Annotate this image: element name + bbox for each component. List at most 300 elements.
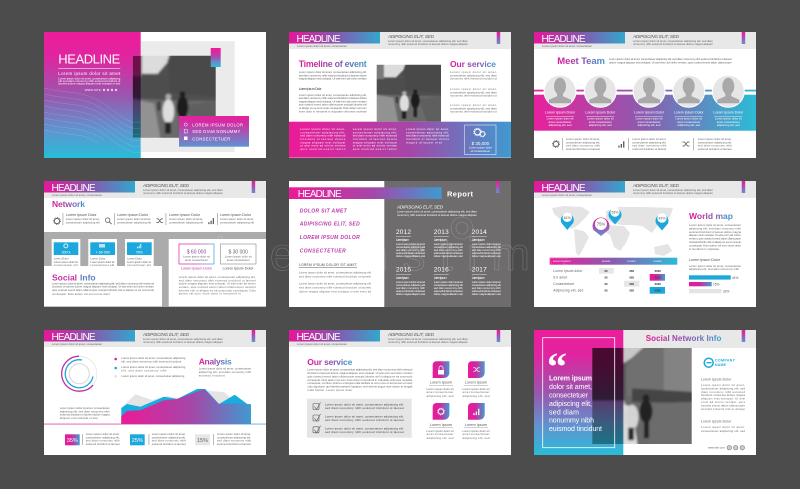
network item 1: consectetuer adipiscing elit [66, 220, 100, 224]
service tile: chart [462, 403, 490, 440]
band text columns: consectetuer adipiscing elit, [406, 130, 449, 134]
header band: nonummy nibh euismod tincidunt ut laoreet dolore magna aliquam [388, 340, 469, 344]
header band [289, 330, 511, 347]
panel: pricing: lobortis nisl ut aliquip ex ea commodo consequat. Duis [179, 288, 256, 292]
company text: consectetuer adipiscing elit, sed [701, 386, 745, 390]
header band: ADIPISCING ELIT, SED [142, 183, 190, 188]
header band: ADIPISCING ELIT, SED [632, 183, 680, 188]
quote text: consectetuer [549, 393, 589, 400]
subheading and paragraphs: LOREM IPSUM DOLOR SIT AMET [299, 263, 357, 267]
header band: ADIPISCING ELIT, SED [632, 34, 680, 39]
progress bars: Lorem Ipsum Dolor [689, 258, 721, 262]
team member 2: adipiscing elit, sed [589, 123, 612, 127]
year 2016: Lorem Ipsum [434, 276, 447, 280]
bullet notes: Lorem ipsum dolor sit amet, consectetuer adipiscing [121, 374, 185, 378]
header band: Lorem ipsum dolor sit amet, consectetuer adipiscing elit, sed diam [633, 39, 714, 43]
feature 1: Lorem ipsum dolor sit amet, [566, 137, 600, 141]
panel: social info: tincidunt ut laoreet dolore magna aliquam erat volutpat. Ut wisi enim ad minim veniam [52, 285, 155, 289]
stat 25%: consectetuer adipiscing elit, [152, 435, 186, 439]
service paragraph: odio dignissim qui blandit praesent luptatum zzril delenit augue duis dolore te feugait [307, 385, 413, 389]
network item 3: Lorem Ipsum Dolor [169, 213, 201, 217]
data table: 88 [604, 276, 608, 280]
timeline paragraph: sed diam nonummy nibh euismod tincidunt ut laoreet dolore [299, 96, 367, 100]
header band: nonummy nibh euismod tincidunt ut laoreet dolore magna aliquam [633, 191, 714, 195]
panel: pricing: dolore magna aliquam erat volutpat. Ut wisi enim ad minim [179, 282, 256, 286]
bullet notes: Lorem ipsum dolor sit amet, consectetuer adipiscing [121, 356, 186, 360]
accent square [211, 48, 221, 67]
service tile: lock: Lorem Ipsum [430, 381, 452, 385]
band text columns: Lorem ipsum dolor sit amet, [353, 127, 397, 131]
service paragraph: consequat. Duis autem vel eum iriure dolor in hendrerit in vulputate velit esse molestie [307, 378, 413, 382]
intro text: dolore magna aliquam erat volutpat. Ut wisi enim ad minim veniam, quis nostrud exerci tation ullamcorper [609, 60, 732, 64]
service paragraph: nulla facilisi. Lorem ipsum dolor [307, 388, 352, 392]
checklist panel: Lorem ipsum dolor sit amet, consectetuer adipiscing elit, [325, 402, 404, 406]
stat box with gears: $ 30,000 [472, 141, 490, 146]
year 2017: euismod tincidunt ut laoreet [472, 289, 501, 293]
team member 3: amet consectetuer [637, 120, 661, 124]
year 2012: euismod tincidunt ut laoreet [396, 251, 425, 255]
team member 5: adipiscing elit, sed [717, 123, 740, 127]
team member 5: amet consectetuer [717, 120, 740, 124]
service tile: chart: Lorem Ipsum [465, 423, 487, 427]
item list: DOLOR SIT AMET [300, 209, 348, 215]
watermark: dreamstime [200, 228, 570, 280]
data table: Lorem [653, 259, 662, 263]
team member 5: Lorem Ipsum Dolor [713, 110, 744, 114]
slide 6: world map [534, 181, 756, 307]
callout box: LOREM IPSUM DOLOR [192, 122, 243, 127]
header band [289, 32, 511, 49]
year 2016: dolore magna aliquam erat [434, 292, 463, 296]
area chart [121, 389, 251, 424]
band text columns: ut wisi enim ad minim veniam [353, 144, 398, 148]
team member 3: Lorem Ipsum Dolor [634, 110, 665, 114]
data table: Sit amet [553, 276, 567, 280]
cover subtitle: laoreet dolore magna aliquam erat volutpat ut wisi [58, 82, 121, 86]
network item 4: Lorem ipsum dolor sit amet, [220, 217, 254, 221]
company text: Lorem ipsum dolor sit amet, [701, 383, 745, 387]
panel: pricing: sed diam nonummy nibh euismod tincidunt ut laoreet [179, 278, 256, 282]
stat 15%: Lorem ipsum dolor sit amet, [217, 432, 251, 436]
stat card 2: Lorem Dolor [90, 256, 105, 260]
service tile: shuffle: Lorem ipsum dolor sit [462, 387, 490, 391]
panel: pricing: Lorem Ipsum Dolor [181, 266, 213, 270]
company text: diam nonummy nibh euismod [701, 390, 745, 394]
timeline paragraph: Lorem ipsum dolor sit amet, consectetuer adipiscing elit, [299, 70, 367, 74]
year 2013: Lorem ipsum dolor sit amet [434, 242, 463, 246]
team member 4: Lorem Ipsum Dolor [674, 110, 704, 114]
left chart note: adipiscing elit, sed diam nonummy nibh [60, 409, 110, 413]
year 2016: sed diam nonummy nibh [434, 286, 463, 290]
panel: pricing: Lorem ipsum dolor sit [183, 254, 210, 258]
band text columns: Lorem ipsum dolor sit amet, [406, 127, 449, 131]
service tile: shuffle [462, 361, 490, 398]
header band [44, 330, 266, 347]
headline banner [289, 187, 442, 200]
quote text: Lorem ipsum [549, 376, 592, 383]
service paragraphs: Lorem ipsum dolor sit amet, [450, 103, 497, 107]
progress bars: 32% [723, 290, 730, 294]
data table: Lorem [627, 259, 636, 263]
timeline paragraph: quis nostrud exerci tation ullamcorper suscipit lobortis nisl [299, 102, 367, 106]
progress bars [689, 258, 741, 294]
year 2012: Lorem ipsum dolor sit amet [396, 242, 425, 246]
header band: HEADLINE [542, 34, 586, 45]
stat card 3: 76% [136, 250, 144, 254]
company logo [704, 358, 736, 367]
year 2013: 2013 [434, 229, 449, 236]
callout box: CONSECTETUER [192, 136, 230, 141]
stat box with gears: sit consectetuer [471, 149, 490, 153]
quote frame [543, 338, 615, 448]
item list [299, 209, 360, 254]
company text: nostrud exerci tation ullamcorper [701, 403, 745, 407]
header band: nonummy nibh euismod tincidunt ut laoreet dolore magna aliquam [388, 42, 469, 46]
header band: ADIPISCING ELIT, SED [142, 332, 190, 337]
callout box: SED DIAM NONUMMY [192, 129, 241, 134]
year 2012: Lorem Ipsum [396, 238, 409, 242]
data table: 88 [604, 269, 608, 273]
service paragraphs [450, 70, 498, 114]
data table: 8888 [655, 269, 661, 273]
progress bars: adipiscing elit, sed diam nonummy nibh [689, 267, 739, 271]
cover photo [129, 52, 220, 142]
panel: pricing [169, 239, 266, 306]
header band: nonummy nibh euismod tincidunt ut laoreet dolore magna aliquam [143, 191, 224, 195]
header band: HEADLINE [296, 332, 341, 343]
panel: social info: Lorem ipsum dolor sit amet, consectetuer adipiscing elit, sed diam nonummy nibh euismod [52, 281, 154, 285]
analysis paragraph: Lorem ipsum dolor sit amet, consectetuer [199, 367, 251, 371]
year 2017: Lorem ipsum dolor sit amet [472, 280, 501, 284]
stat card 2: Lorem ipsum dolor sit [90, 260, 115, 264]
heading: meet team: Meet Team [557, 56, 605, 67]
year 2015: 2015 [396, 267, 411, 274]
service paragraph: quis nostrud exerci tation ullamcorper suscipit lobortis nisl ut aliquip ex ea commodo [307, 374, 413, 378]
stat 25%: 25% [132, 438, 143, 444]
slide 8: our service [289, 330, 511, 455]
stat box with gears [465, 125, 496, 155]
company text: enim ad minim veniam, quis [701, 400, 746, 404]
stat box with gears: Lorem ipsum dolor [469, 146, 492, 150]
company text: tincidunt ut laoreet dolore magna [701, 393, 745, 397]
network item 4 [208, 213, 254, 225]
year 2016 [434, 267, 463, 296]
header band: HEADLINE [542, 183, 586, 194]
service tile: lock: Lorem ipsum dolor sit [426, 387, 454, 391]
data table: Adipiscing elit, sed [553, 288, 584, 292]
right intro: Lorem ipsum dolor sit amet, consectetuer adipiscing elit, sed diam [397, 210, 478, 214]
data table: Lorem ipsum dolor [553, 269, 583, 273]
service paragraphs: Lorem ipsum dolor sit amet, [450, 70, 497, 74]
photo overlay [592, 348, 623, 444]
header band: HEADLINE [52, 183, 96, 194]
service paragraph [307, 368, 413, 392]
year 2015: Lorem ipsum dolor sit amet [396, 280, 425, 284]
header band: Lorem ipsum dolor sit amet, consectetuer [297, 342, 347, 346]
panel: social info: quis nostrud exerci tation ullamcorper suscipit lobortis nisl ut aliquip ex ea commodo [52, 288, 154, 292]
service paragraph: consequat, vel illum dolore eu feugiat nulla facilisis at vero eros et accumsan et iusto [307, 381, 413, 385]
header band: Lorem ipsum dolor sit amet, consectetuer [52, 193, 102, 197]
map pin 42%: 42% [658, 216, 666, 220]
company logo: COMPANY [715, 358, 736, 362]
network item 4: consectetuer adipiscing elit [220, 220, 254, 224]
network item 4: Lorem Ipsum Dolor [220, 213, 252, 217]
left chart note [60, 406, 110, 420]
left white panel [289, 181, 384, 307]
service paragraphs: consectetuer adipiscing elit, sed diam [450, 106, 498, 110]
band text columns: consectetuer adipiscing elit, [300, 130, 346, 134]
map pin 41%: 61% [564, 216, 571, 220]
header band: Lorem ipsum dolor sit amet, consectetuer [542, 193, 592, 197]
data table: 88 [604, 282, 608, 286]
bullet notes [114, 356, 186, 378]
service tile: chart: amet consectetuer [462, 432, 490, 436]
timeline paragraph: iriure dolor in hendrerit in vulputate velit esse molestie [299, 110, 367, 114]
map paragraph: consequat. Duis autem vel eum iriure dolor [689, 243, 741, 247]
year 2014: sed diam nonummy nibh [472, 248, 501, 252]
quote text: nonummy nibh [549, 418, 594, 425]
timeline paragraph: magna aliquam erat volutpat. Ut wisi enim ad minim veniam [299, 77, 367, 81]
subheading and paragraphs: sed diam nonummy nibh euismod tincidunt ut laoreet [299, 274, 371, 278]
data table: Consectetuer [553, 282, 575, 286]
year 2016: euismod tincidunt ut laoreet [434, 289, 463, 293]
panel: pricing: Lorem ipsum dolor sit amet, consectetuer adipiscing elit, [179, 275, 256, 279]
cover subtitle: Lorem ipsum dolor sit amet [58, 71, 121, 76]
chart baseline [44, 423, 266, 425]
feature 2: Lorem ipsum dolor sit amet, [632, 137, 667, 141]
band text columns: Lorem ipsum dolor sit amet, [300, 127, 346, 131]
stat 25%: sed diam nonummy nibh [152, 438, 186, 442]
photo [587, 343, 697, 449]
stat 25%: euismod tincidunt ut laoreet [152, 442, 186, 446]
year 2017: sed diam nonummy nibh [472, 286, 501, 290]
year 2015: Lorem Ipsum [396, 276, 409, 280]
header band: HEADLINE [52, 332, 96, 343]
header band [534, 181, 756, 198]
service paragraphs: consectetuer adipiscing elit, sed diam [450, 73, 498, 77]
year 2017: 2017 [472, 267, 487, 274]
year 2014: consectetuer adipiscing elit [472, 245, 501, 249]
stat card 3 [125, 239, 154, 267]
slide 7: analysis [44, 330, 266, 455]
header band: Lorem ipsum dolor sit amet, consectetuer adipiscing elit, sed diam [143, 188, 224, 192]
company text: Lorem Ipsum Dolor [701, 420, 732, 424]
heading: world map: World map [689, 211, 733, 221]
data table: 8888 [655, 282, 661, 286]
network item 1: Lorem Ipsum Dolor [66, 213, 97, 217]
service tile: gear [426, 403, 454, 440]
team member 1 [544, 75, 576, 127]
panel: pricing: $ 60 000 [187, 250, 206, 256]
stat card 1: Lorem Dolor [54, 256, 69, 260]
bullet notes: Lorem ipsum dolor sit amet, consectetuer adipiscing [121, 365, 186, 369]
stat 35%: consectetuer adipiscing elit, [86, 435, 120, 439]
company text: Lorem Ipsum Dolor [701, 377, 732, 381]
team member 1: adipiscing elit, sed [549, 123, 572, 127]
stat 35%: 35% [67, 438, 78, 444]
stat 15%: 15% [197, 438, 208, 444]
quote text: dolor sit amet, [549, 384, 592, 391]
service tile: chart: adipiscing elit, sed [462, 436, 490, 440]
wave pattern [44, 88, 140, 152]
team member 4: Lorem ipsum dolor sit [675, 116, 702, 120]
network item 1 [54, 213, 100, 225]
right intro: nonummy nibh euismod tincidunt ut laoreet dolore magna aliquam [397, 213, 478, 217]
quote text: sed diam [549, 409, 579, 416]
team member 1: Lorem ipsum dolor sit [547, 116, 574, 120]
header band: ADIPISCING ELIT, SED [387, 34, 435, 39]
service paragraph: Lorem ipsum dolor sit amet, consectetuer adipiscing elit, sed diam nonummy nibh euismod [307, 368, 413, 372]
checklist panel: sed diam nonummy nibh euismod tincidunt ut laoreet [325, 430, 404, 434]
stat card 2: + 60 000 [96, 250, 110, 254]
map pin 75% [592, 218, 610, 236]
network item 2 [105, 213, 151, 225]
band text columns: quis nostrud exerci tation [353, 147, 397, 151]
bullet notes: elit, sed diam nonummy nibh euismod tincidunt [121, 360, 182, 364]
subheading and paragraphs: Lorem ipsum dolor sit amet, consectetuer adipiscing elit [299, 282, 371, 286]
map paragraph: veniam, quis nostrud exerci tation ullamcorper [689, 237, 741, 241]
timeline paragraph: ut aliquip ex ea commodo consequat. Duis autem vel eum [299, 106, 367, 110]
band text columns: consectetuer adipiscing elit, [353, 130, 397, 134]
team member 5 [712, 75, 744, 127]
company logo: NAME [715, 363, 727, 367]
panel: pricing: $ 30 000 [228, 250, 248, 256]
map paragraph: adipiscing elit, sed diam nonummy nibh [689, 226, 741, 230]
stat card 2: consectetuer elit [90, 263, 115, 267]
header band: Lorem ipsum dolor sit amet, consectetuer adipiscing elit, sed diam [388, 337, 469, 341]
header band [534, 32, 756, 49]
stat 35%: Lorem ipsum dolor sit amet, [86, 432, 120, 436]
subheading and paragraphs: Lorem ipsum dolor sit amet, consectetuer adipiscing elit [299, 271, 371, 275]
map paragraph [689, 223, 742, 251]
company text: consectetuer adipiscing elit, sed [701, 429, 745, 433]
year 2015: euismod tincidunt ut laoreet [396, 289, 425, 293]
band text columns: sed diam nonummy nibh euismod [300, 134, 346, 138]
timeline paragraph: sed diam nonummy nibh euismod tincidunt ut laoreet dolore [299, 73, 367, 77]
map paragraph: euismod tincidunt ut laoreet dolore magna [689, 230, 741, 234]
header band: Lorem ipsum dolor sit amet, consectetuer [297, 44, 347, 48]
slide 3: meet team [534, 32, 756, 158]
subheading and paragraphs: dolore magna aliquam erat volutpat ut wisi enim ad [299, 289, 371, 293]
year 2013: sed diam nonummy nibh [434, 248, 463, 252]
company text: aliquam erat volutpat. Ut wisi [701, 397, 745, 401]
cover subtitle: Lorem ipsum dolor sit amet, consectetuer adipiscing [58, 77, 121, 81]
checklist panel: sed diam nonummy nibh euismod tincidunt ut laoreet [325, 418, 404, 422]
team member 3: adipiscing elit, sed [638, 123, 661, 127]
item list: CONSECTETUER [300, 248, 346, 254]
feature 1: euismod tincidunt ut laoreet [566, 147, 600, 151]
data table: Lorem Ipsum [553, 259, 571, 263]
feature 2: consectetuer adipiscing elit, [632, 140, 667, 144]
heading: network: Network [52, 199, 85, 209]
stat card 2 [88, 239, 117, 267]
map pin 42% [656, 213, 668, 230]
network item 2: Lorem Ipsum Dolor [117, 213, 149, 217]
header band: ADIPISCING ELIT, SED [387, 332, 435, 337]
data table: Lorem [602, 259, 611, 263]
year 2013: dolore magna aliquam erat [434, 254, 463, 258]
photo [373, 62, 444, 125]
timeline paragraph: magna aliquam erat volutpat. Ut wisi enim ad minim veniam [299, 99, 367, 103]
panel: pricing: autem vel eum iriure dolor in hendrerit in [179, 292, 241, 296]
service paragraphs: nonummy nibh euismod tincidunt ut [450, 77, 497, 81]
map paragraph: aliquam erat volutpat. Ut wisi enim ad minim [689, 233, 742, 237]
panel: pricing: Lorem ipsum dolor sit [225, 254, 252, 258]
panel: pricing: veniam, quis nostrud exerci tation ullamcorper suscipit [179, 285, 256, 289]
marker [742, 330, 745, 342]
panel: social info [44, 266, 162, 306]
band text columns: quis nostrud exerci tation [300, 147, 346, 151]
stat 25% [130, 432, 186, 446]
year 2016: Lorem ipsum dolor sit amet [434, 280, 463, 284]
team member 4: amet consectetuer [677, 120, 700, 124]
data table: 8888 [655, 288, 661, 292]
cover subtitle: WWW.SITE [85, 88, 101, 92]
year 2016: 2016 [434, 267, 449, 274]
timeline paragraph: Lorem Ipsum Dolor [299, 87, 322, 91]
feature 2: euismod tincidunt ut laoreet [632, 147, 667, 151]
year 2016: consectetuer adipiscing elit [434, 283, 463, 287]
header band: nonummy nibh euismod tincidunt ut laoreet dolore magna aliquam [633, 42, 714, 46]
band text columns: sed diam nonummy nibh euismod [353, 134, 397, 138]
slide 9: social network info [534, 330, 756, 455]
stat 15% [195, 432, 251, 446]
headline banner: HEADLINE [298, 189, 342, 200]
year 2017: Lorem Ipsum [472, 276, 485, 280]
stat 15%: euismod tincidunt ut laoreet [217, 442, 251, 446]
header band: Lorem ipsum dolor sit amet, consectetuer [542, 44, 592, 48]
timeline paragraph: Lorem ipsum dolor sit amet, consectetuer adipiscing elit, [299, 93, 367, 97]
team member 2: Lorem Ipsum Dolor [585, 110, 616, 114]
stat card 3: consectetuer elit [127, 263, 151, 267]
service tile: chart: Lorem ipsum dolor sit [462, 429, 490, 433]
team member 4: adipiscing elit, sed [677, 123, 701, 127]
feature 2 [618, 137, 667, 151]
year 2015: sed diam nonummy nibh [396, 286, 425, 290]
team member 5: Lorem ipsum dolor sit [715, 116, 742, 120]
callout box [179, 116, 249, 147]
band text columns: magna aliquam erat [406, 140, 442, 144]
stat card 3: Lorem Dolor [127, 256, 142, 260]
intro text: Lorem ipsum dolor sit amet, consectetuer adipiscing elit, sed diam nonummy nibh euismod tincidunt ut laoreet [609, 57, 732, 61]
analysis paragraph [199, 367, 252, 377]
stat card 1: 300 k [62, 250, 71, 254]
data table: 888 [629, 269, 634, 273]
year 2014: Lorem ipsum dolor sit amet [472, 242, 501, 246]
service tile: shuffle: Lorem Ipsum [465, 381, 487, 385]
team member 3: Lorem ipsum dolor sit [636, 116, 663, 120]
network item 2: consectetuer adipiscing elit [117, 220, 151, 224]
band text columns: tincidunt ut laoreet dolore [406, 137, 449, 141]
data table: 888 [629, 288, 634, 292]
data table: 88 [604, 288, 608, 292]
progress bars: 15% [713, 283, 720, 287]
heading: timeline of event: Timeline of event [299, 59, 367, 69]
year 2013: consectetuer adipiscing elit [434, 245, 463, 249]
map paragraph: suscipit lobortis nisl ut aliquip ex ea commodo [689, 240, 741, 244]
header band: Lorem ipsum dolor sit amet, consectetuer adipiscing elit, sed diam [143, 337, 224, 341]
year 2014: 2014 [472, 229, 487, 236]
cover subtitle: elit sed diam nonummy nibh euismod tincidunt ut [58, 79, 121, 83]
service tile: lock: adipiscing elit, sed [426, 394, 454, 398]
band text columns [300, 127, 449, 151]
year 2014: Lorem Ipsum [472, 238, 485, 242]
slide 4: network and social info [44, 181, 266, 307]
panel: pricing: Lorem Ipsum Dolor [222, 266, 254, 270]
top gray band [623, 330, 756, 348]
checklist panel: Lorem ipsum dolor sit amet, consectetuer adipiscing elit, [325, 414, 404, 418]
heading: social network info: Social Network Info [646, 334, 722, 343]
